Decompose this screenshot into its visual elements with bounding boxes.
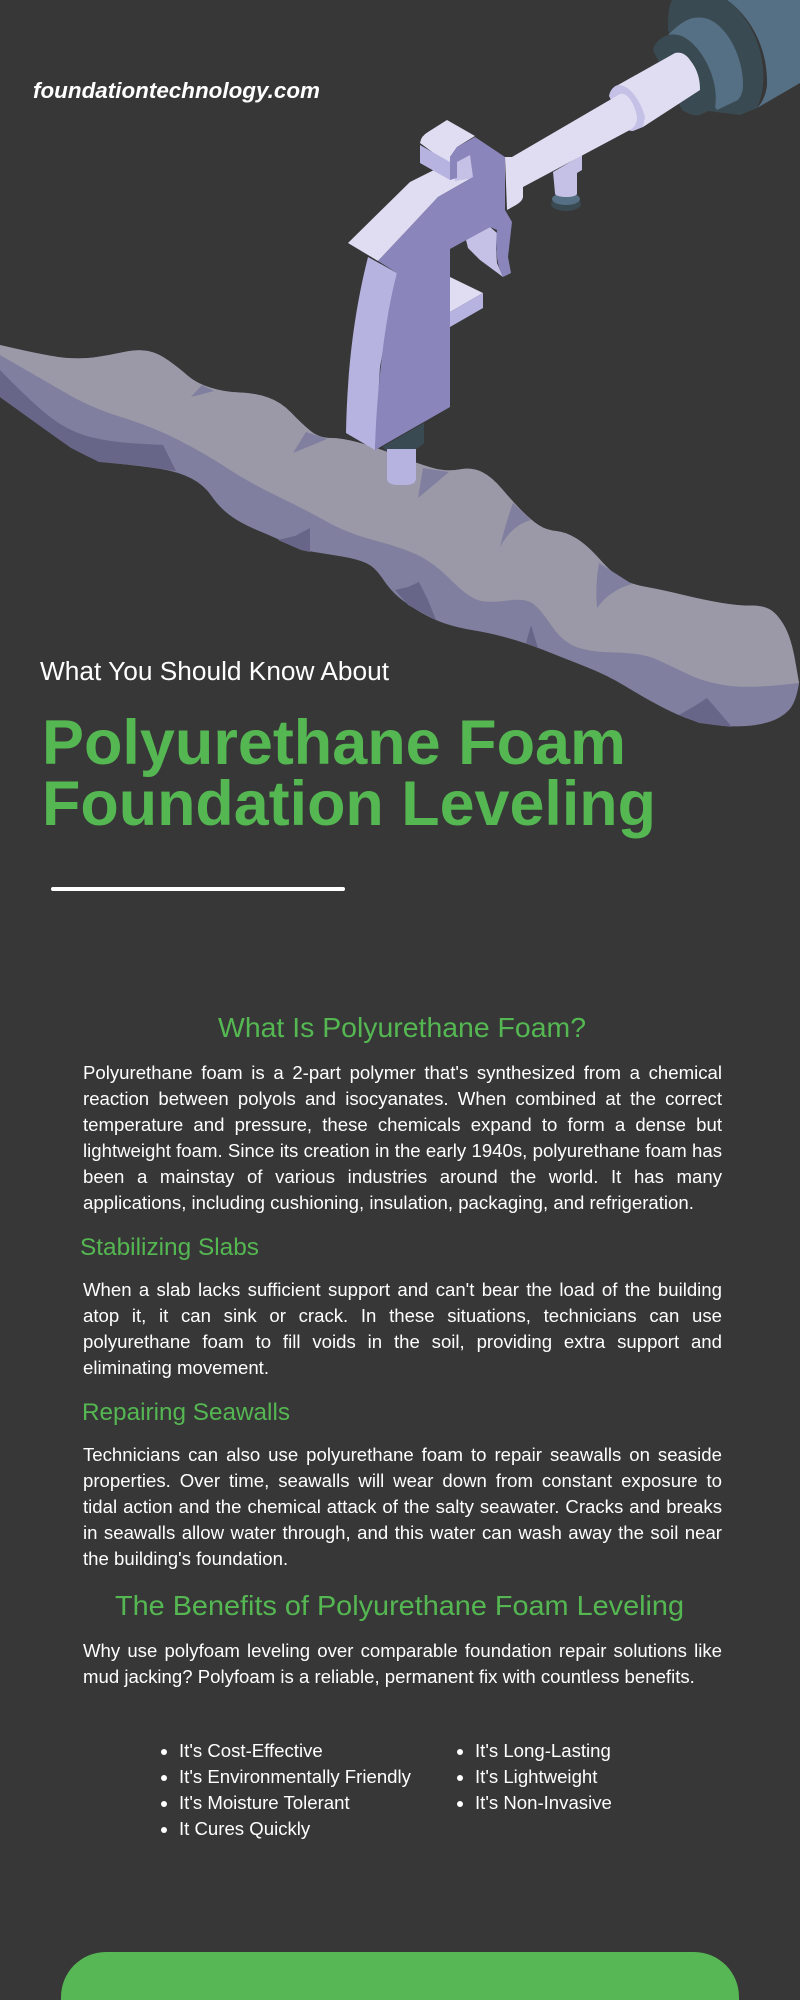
- list: benefits left column: It's Environmentally Friendly: [179, 1766, 411, 1787]
- illustration: spray gun: [346, 53, 700, 485]
- title: Foundation Leveling: [42, 769, 656, 839]
- text block: benefits intro: mud jacking? Polyfoam is a reliable, permanent fix with countless benefits.: [83, 1666, 695, 1687]
- title underline: [51, 887, 345, 891]
- text block: stabilizing slabs: eliminating movement.: [83, 1357, 269, 1378]
- list: benefits right column: It's Long-Lasting: [475, 1740, 611, 1761]
- text block: what is polyurethane foam: [83, 1062, 722, 1213]
- heading: stabilizing slabs: Stabilizing Slabs: [80, 1234, 259, 1261]
- text block: stabilizing slabs: atop it, it can sink or crack. In these situations, technicians can use: [83, 1305, 722, 1326]
- list: benefits left column: It's Cost-Effective: [179, 1740, 323, 1761]
- text block: repairing seawalls: Technicians can also use polyurethane foam to repair seawalls on seaside: [83, 1444, 722, 1465]
- text block: stabilizing slabs: When a slab lacks sufficient support and can't bear the load of the building: [83, 1279, 722, 1300]
- list: benefits left column: It's Moisture Tolerant: [179, 1792, 350, 1813]
- list: benefits right column: [457, 1740, 612, 1813]
- heading: benefits: The Benefits of Polyurethane Foam Leveling: [115, 1590, 684, 1621]
- illustration: foam bead: [0, 345, 799, 727]
- heading: repairing seawalls: Repairing Seawalls: [82, 1399, 290, 1426]
- text block: stabilizing slabs: [83, 1279, 722, 1378]
- text block: repairing seawalls: the building's foundation.: [83, 1548, 288, 1569]
- illustration: hose connector: [653, 0, 800, 115]
- text block: benefits intro: [83, 1640, 722, 1687]
- text block: what is polyurethane foam: applications, including cushioning, insulation, packaging, and refrigeration.: [83, 1192, 694, 1213]
- text block: repairing seawalls: tidal action and the chemical attack of the salty seawater. Cracks and breaks: [83, 1496, 722, 1517]
- text block: what is polyurethane foam: Polyurethane foam is a 2-part polymer that's synthesized from a chemical: [83, 1062, 722, 1083]
- text block: what is polyurethane foam: temperature and pressure, these chemicals expand to form a dense but: [83, 1114, 722, 1135]
- site name: foundationtechnology.com: [33, 78, 320, 103]
- heading: what is polyurethane foam: What Is Polyurethane Foam?: [218, 1012, 586, 1043]
- text block: what is polyurethane foam: been a mainstay of various industries around the world. It has many: [83, 1166, 722, 1187]
- text block: repairing seawalls: in seawalls allow water through, and this water can wash away the soil near: [83, 1522, 722, 1543]
- text block: stabilizing slabs: polyurethane foam to fill voids in the soil, providing extra support and: [83, 1331, 722, 1352]
- text block: repairing seawalls: properties. Over time, seawalls will wear down from constant exposure to: [83, 1470, 722, 1491]
- text block: what is polyurethane foam: lightweight foam. Since its creation in the early 1940s, polyurethane foam has: [83, 1140, 722, 1161]
- green footer panel: [61, 1952, 739, 2000]
- text block: repairing seawalls: [83, 1444, 722, 1569]
- list: benefits right column: It's Lightweight: [475, 1766, 597, 1787]
- title: Polyurethane Foam: [42, 708, 626, 778]
- title: [42, 708, 656, 839]
- text block: benefits intro: Why use polyfoam leveling over comparable foundation repair solutions like: [83, 1640, 722, 1661]
- list: benefits right column: It's Non-Invasive: [475, 1792, 612, 1813]
- list: benefits left column: It Cures Quickly: [179, 1818, 310, 1839]
- list: benefits left column: [161, 1740, 411, 1839]
- text block: what is polyurethane foam: reaction between polyols and isocyanates. When combined at the correct: [83, 1088, 722, 1109]
- subtitle: What You Should Know About: [40, 658, 389, 686]
